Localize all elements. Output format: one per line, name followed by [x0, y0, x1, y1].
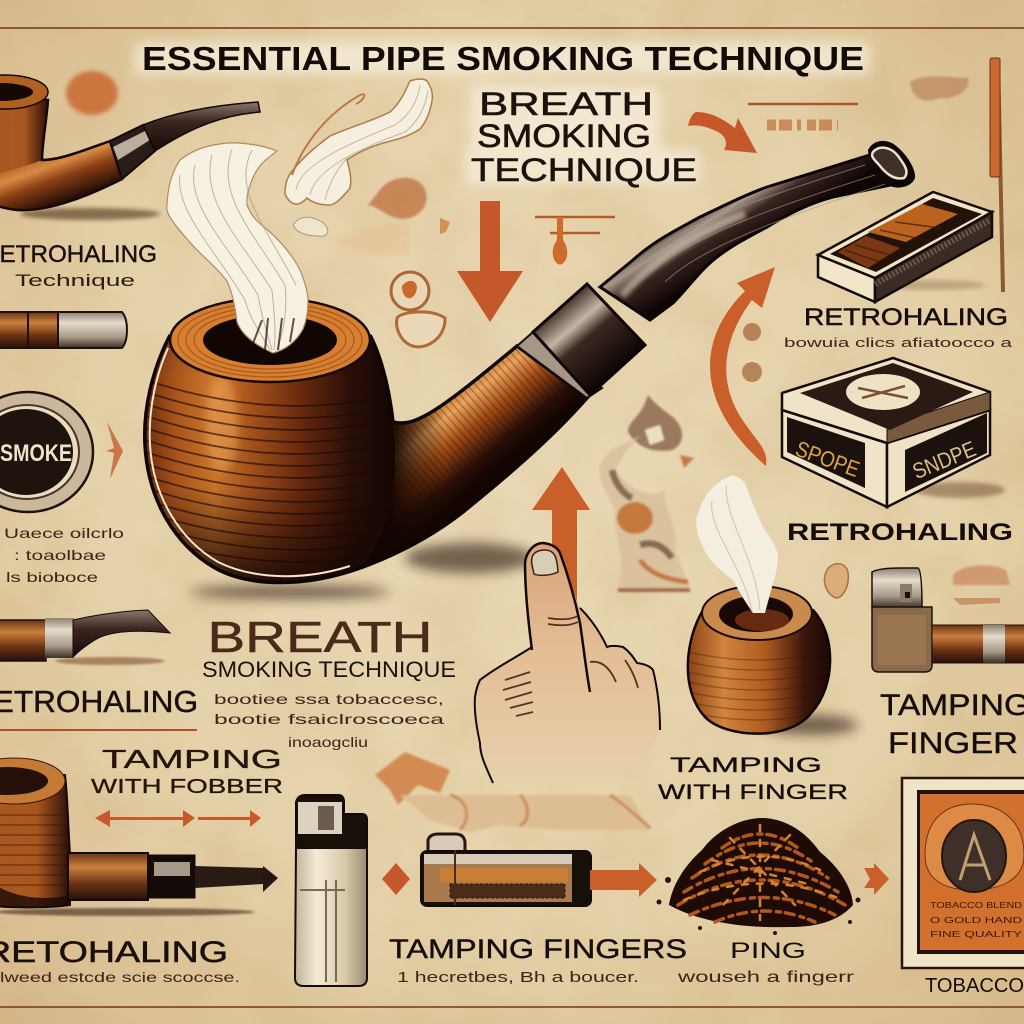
label: aping: PING [730, 938, 806, 963]
underline: mid-left [0, 729, 197, 731]
icon: snuff box [782, 358, 1005, 507]
decorative sketch marks [335, 178, 615, 347]
label: breath: BREATH [208, 613, 432, 662]
subtitle: breath smoking technique: BREATH [479, 86, 653, 122]
mouthpiece [868, 141, 915, 188]
bowl rim [170, 298, 370, 382]
icon: tobacco pile [656, 818, 860, 935]
sketch: orange brush strokes [375, 752, 650, 832]
arrow: small right [864, 863, 889, 895]
label: tamping with finger: WITH FINGER [658, 781, 848, 804]
grain lines [146, 382, 349, 562]
caption: wouch a finger: wouseh a fingerr [677, 969, 855, 986]
ferrule [517, 332, 602, 398]
text block: centre notes [214, 691, 444, 750]
caption: right: bowuia clics afiatoocco a [784, 335, 1013, 350]
icon: cylinder left [0, 312, 127, 348]
label: tamping finger right: TAMPING [880, 689, 1024, 722]
shadow [190, 543, 535, 599]
title: ESSENTIAL PIPE SMOKING TECHNIQUE [142, 40, 864, 77]
text block: left notes: ls bioboce [6, 569, 98, 585]
smudge: orange watercolor [66, 71, 118, 115]
caption: lower-left: lweed estcde scie scoccse. [0, 969, 240, 985]
main pipe illustration [130, 141, 915, 599]
icon: snuff box: SNDPE [909, 436, 979, 484]
bowl hole [203, 315, 337, 365]
small dots [742, 323, 762, 382]
label: tobacco: TOBACCO [925, 975, 1024, 997]
subtitle: breath smoking technique: SMOKING [477, 118, 651, 154]
small smoking bowl [680, 475, 858, 735]
arrow: right [590, 863, 657, 897]
arrow: up [532, 467, 590, 625]
arrow: small tin arrow [106, 422, 123, 479]
label: tamping fingers: TAMPING FINGERS [389, 934, 687, 964]
title glow [135, 42, 870, 184]
bowl highlight [206, 377, 238, 473]
text block: left notes: : toaolbae [14, 547, 106, 563]
text block: centre notes: inoaogcliu [288, 734, 368, 750]
icon: hand with finger [475, 543, 660, 785]
orange vertical bar [990, 58, 1003, 292]
label: retrohaling right 2: RETROHALING [787, 519, 1013, 546]
subtitle: breath smoking technique [471, 86, 697, 188]
arrow: top right small [688, 112, 757, 153]
arrow: down [457, 201, 523, 322]
label: tamping with finger [658, 754, 848, 804]
text block: left notes [4, 525, 124, 585]
label: tamping with fobber [91, 744, 283, 798]
arrow: double headed [95, 810, 261, 827]
fingernail [532, 550, 558, 575]
label: tamping with fobber: TAMPING [102, 744, 282, 774]
collar [533, 284, 645, 395]
stem [600, 155, 900, 320]
label: tamping finger right [880, 689, 1024, 760]
bowl body [145, 335, 420, 583]
label: smoking technique: SMOKING TECHNIQUE [202, 657, 456, 682]
sketch: right blotches [824, 564, 1010, 605]
icon: tobacco package: FINE QUALITY [930, 930, 1023, 939]
arrow: diamond [382, 863, 410, 895]
text block: centre notes: bootiee ssa tobaccesc, [214, 691, 444, 707]
icon: mid-left pipe stem [0, 610, 170, 665]
caption: tamping fingers: 1 hecretbes, Bh a boucer. [397, 969, 639, 986]
icon: lower-left pipe [0, 758, 278, 916]
text block: left notes: Uaece oilcrlo [4, 525, 124, 541]
label: tamping with finger: TAMPING [670, 754, 822, 777]
top right marks [748, 76, 969, 125]
icon: smoke tin: SMOKE [0, 440, 72, 467]
sketch: center figure [600, 395, 694, 592]
icon: tobacco package: TOBACCO BLEND [930, 901, 1022, 910]
smoke: large plume [167, 79, 432, 353]
pipe outline [145, 335, 587, 583]
white edge highlight [150, 348, 350, 576]
shank [382, 348, 584, 555]
arrow: curved [710, 267, 775, 466]
icon: matchbox [818, 192, 992, 302]
icon: snuff box: SPOPE [792, 436, 863, 482]
icon: tobacco package: O GOLD HAND [930, 916, 1022, 925]
label: retrohaling right: RETROHALING [804, 304, 1008, 331]
icon: lighter [295, 795, 367, 986]
icon: lighter and tube right [872, 568, 1024, 672]
label: tamping with fobber: WITH FOBBER [91, 776, 283, 798]
subtitle: breath smoking technique: TECHNIQUE [471, 152, 697, 188]
icon: top-left pipe [0, 75, 260, 220]
icon: smoke tin [0, 392, 93, 512]
label: technique: Technique [15, 271, 135, 290]
icon: tobacco package [902, 778, 1024, 968]
label: tamping finger right: FINGER [888, 727, 1018, 760]
icon: tube lighter [421, 834, 591, 906]
text block: centre notes: bootie fsaiclroscoeca [214, 711, 444, 727]
